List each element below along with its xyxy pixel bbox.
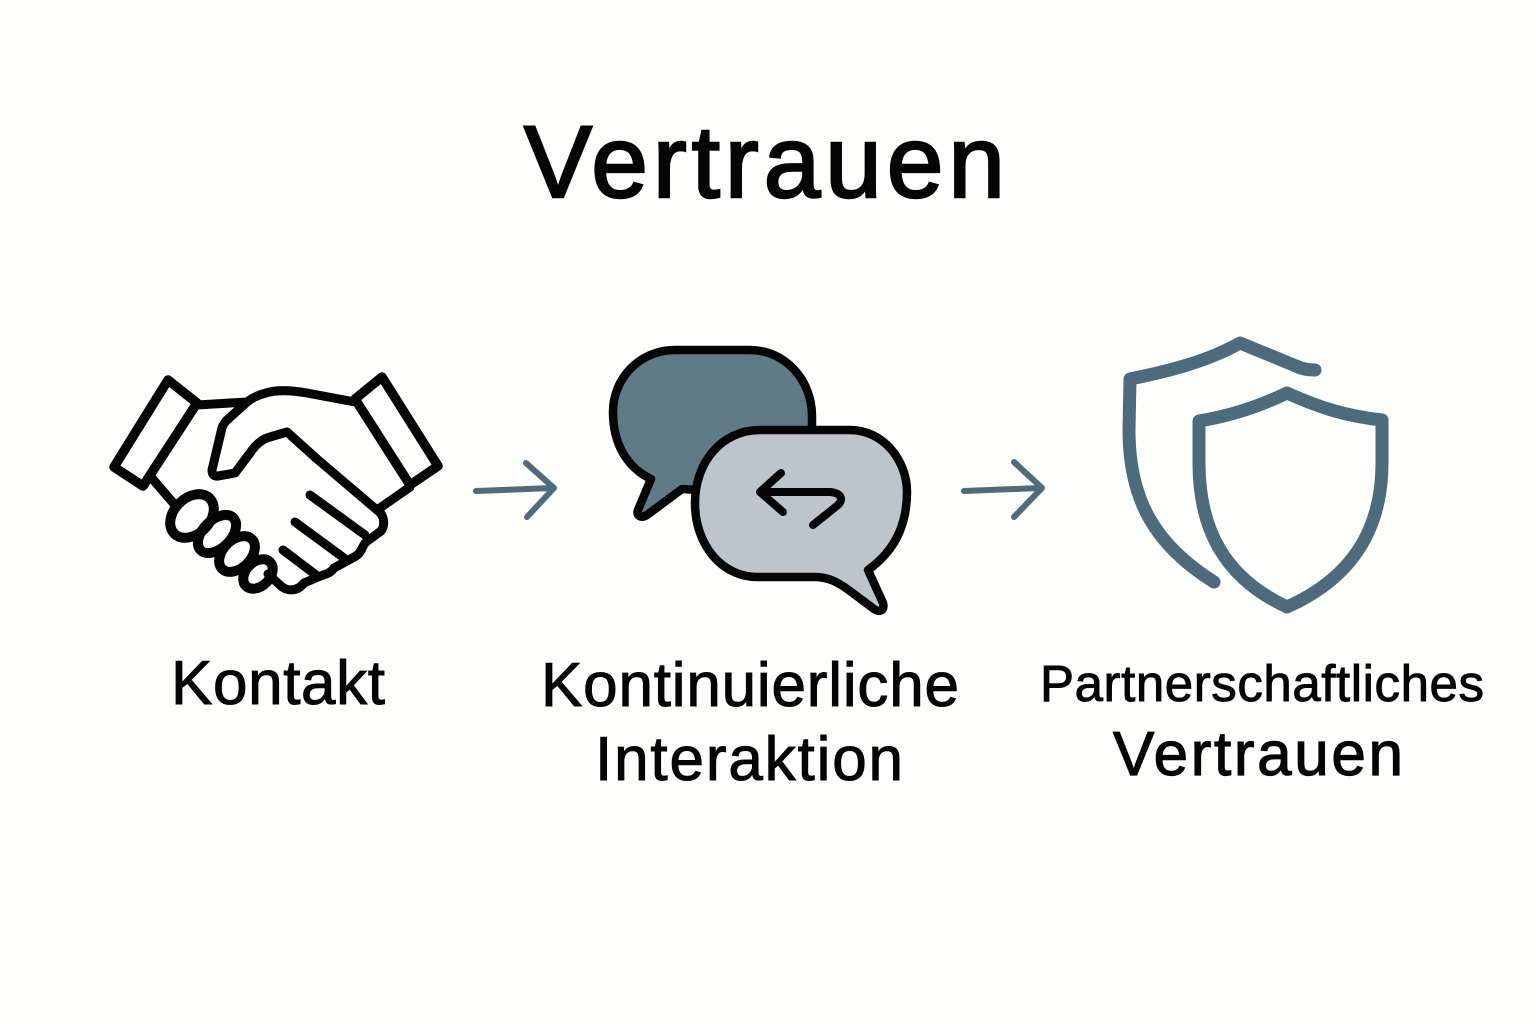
label: Partnerschaftliches Vertrauen: Partnerschaftliches: [1040, 655, 1484, 712]
left cuff: [114, 380, 197, 486]
inner shield: [1199, 393, 1382, 607]
knuckle 4: [237, 553, 279, 595]
label: Partnerschaftliches Vertrauen: Vertrauen: [1113, 720, 1403, 789]
light bubble: [695, 430, 907, 611]
icon: handshake: [114, 377, 438, 595]
arrow 1: [476, 463, 554, 517]
icon: shields: [1129, 343, 1382, 607]
knuckle 2: [191, 508, 243, 560]
left arm and wrist: [150, 402, 247, 505]
right cuff: [355, 377, 438, 485]
title: Vertrauen: [524, 105, 1005, 219]
icon: speech bubbles: [613, 350, 907, 611]
exchange arrow: [760, 473, 841, 525]
right hand with thumb: [212, 391, 410, 510]
outer shield: [1129, 343, 1315, 582]
right hand lower edge with fingertips: [268, 510, 384, 590]
knuckle 1: [162, 486, 222, 546]
label: Kontinuierliche Interaktion: Kontinuierliche: [541, 651, 959, 720]
label: Partnerschaftliches Vertrauen: [1040, 655, 1484, 789]
dark bubble: [613, 350, 812, 517]
finger lines: [283, 495, 365, 575]
knuckle 3: [212, 529, 262, 579]
label: Kontakt: Kontakt: [171, 649, 385, 718]
arrow 2: [964, 462, 1042, 517]
label: Kontinuierliche Interaktion: [541, 651, 959, 794]
label: Kontinuierliche Interaktion: Interaktion: [595, 725, 903, 794]
